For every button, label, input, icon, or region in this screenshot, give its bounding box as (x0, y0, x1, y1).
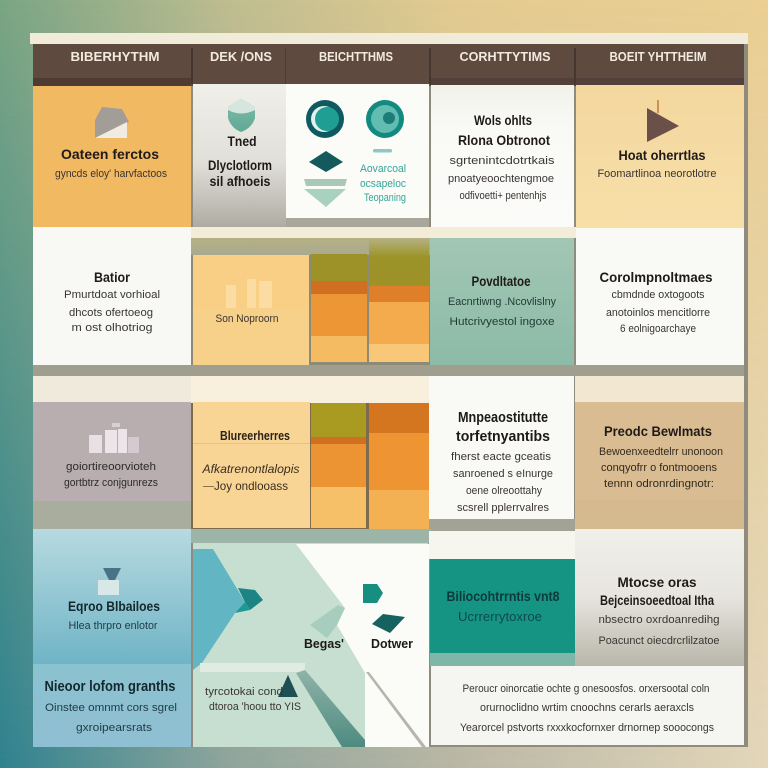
panel: peach with stacks (191, 376, 431, 531)
body line: sanroened s eInurge (453, 468, 553, 480)
panel: beige stacked chart (191, 227, 431, 365)
stacked column two (369, 238, 429, 362)
panel heading two: torfetnyantibs (456, 429, 550, 445)
shape: dark diagonal band (296, 670, 365, 747)
bar chart icon (226, 279, 272, 308)
body line: dtoroa 'hoou tto YIS (209, 701, 301, 713)
chart caption: Son Noproorn (216, 313, 278, 325)
panel: geometric folded centre (191, 529, 431, 747)
body line: Poacunct oiecdrcrlilzatoe (598, 635, 720, 647)
panel heading: Hoat oherrtlas (618, 148, 706, 163)
body line: dhcots ofertoeog (69, 307, 153, 319)
panel heading: Oateen ferctos (61, 147, 159, 162)
shape: teal pentagon (363, 584, 383, 603)
body line: Bewoenxeedtelrr unonoon (599, 446, 723, 458)
panel heading: Preodc Bewlmats (604, 424, 712, 439)
body line: m ost olhotriog (72, 322, 152, 334)
body line: 6 eolnigoarchaye (620, 323, 696, 335)
panel: blue upper left (33, 529, 191, 664)
panel caption: Hlea thrpro enlotor (68, 620, 158, 632)
panel caption: Foomartlinoa neorotlotre (598, 168, 716, 180)
panel caption: gyncds eloy' harvfactoos (55, 168, 167, 180)
stacked column three (311, 403, 366, 528)
body line: Peroucr oinorcatie ochte g onesoosfos. orxersootal coln (462, 683, 710, 695)
body line: gortbtrz conjgunrezs (64, 477, 158, 489)
shape: grey diagonal line (366, 672, 426, 747)
panel: cream and teal column four (429, 531, 575, 666)
body line: Joy ondlooass (214, 479, 288, 493)
shape: small dark triangle (278, 675, 298, 697)
body line: Yearorcel pstvorts rxxxkocfornxer drnornep sooocongs (460, 722, 714, 734)
header: column 1: BIBERHYTHM (70, 50, 160, 64)
body line: orurnoclidno wrtim cnoochns cerarls aeraxcls (480, 702, 694, 714)
panel heading: Tned (228, 134, 256, 149)
icon: stacked triangle (304, 179, 347, 207)
stacked column four (369, 403, 430, 531)
body line: tyrcotokai cond (205, 686, 283, 698)
panel: blue lower left (33, 664, 191, 747)
body line: scsrell pplerrvalres (457, 502, 549, 514)
panel heading: Biliocohtrrntis vnt8 (446, 589, 560, 604)
panel heading: Corolmpnoltmaes (600, 270, 712, 285)
panel heading: Blureerherres (220, 429, 290, 443)
body line: odfivoetti+ pentenhjs (460, 190, 547, 202)
body line: goiortireoorvioteh (66, 461, 156, 473)
shape: mint leaf (310, 605, 345, 638)
panel: white column four row three (429, 376, 575, 531)
shape: lower mint sheet (200, 663, 305, 672)
body line: fherst eacte gceatis (451, 451, 552, 463)
header: column 5: BOEIT YHTTHEIM (610, 50, 706, 64)
teal caption line two: ocsapeloc (360, 178, 406, 190)
icon: ring one (306, 100, 344, 138)
panel: peach top-right (576, 85, 744, 228)
panel caption: Ucrrerrytoxroe (458, 610, 542, 624)
panel heading one: Mnpeaostitutte (458, 410, 548, 426)
panel: white column four (431, 85, 574, 227)
icon: play triangle (647, 100, 679, 142)
body line: conqyofrr o fontmooens (601, 462, 717, 474)
header: column 2: DEK /ONS (210, 50, 272, 64)
header: column 4: CORHTTYTIMS (460, 50, 550, 64)
header: column 3: BEICHTTHMS (319, 50, 393, 64)
body line: oene olreoottahy (466, 485, 542, 497)
icon: ring two (366, 100, 404, 138)
body line: Eacnrtiwng .Ncovlislny (448, 296, 556, 308)
body line: cbmdnde oxtogoots (612, 289, 705, 301)
body line: Oinstee omnmt cors sgrel (45, 702, 177, 714)
body line: Afkatrenontlalopis (201, 462, 300, 476)
panel: grey gradient column two (193, 84, 287, 227)
shape: teal arrow (193, 549, 245, 670)
row gap (33, 365, 744, 376)
panel text line: sil afhoeis (210, 174, 270, 189)
icon: shield (228, 99, 255, 132)
panel text line: Dlyclotlorm (208, 158, 272, 173)
shape: dark kite (372, 614, 405, 633)
panel: white left row two (33, 227, 191, 365)
body line: nbsectro oxrdoanredihg (598, 614, 720, 626)
teal caption line three: Teopaning (364, 192, 406, 204)
body line: tennn odronrdingnotr: (604, 478, 714, 490)
icon: dark hexagon (309, 151, 343, 172)
panel: tan right (575, 376, 744, 529)
shape: teal diamond (235, 588, 263, 613)
panel heading one: Wols ohlts (474, 113, 532, 128)
shape: white folded sheet (296, 544, 429, 747)
panel heading: Eqroo Blbailoes (68, 599, 160, 614)
stacked column one (311, 254, 367, 362)
body line: gxroipearsrats (76, 722, 153, 734)
label: Begas' (304, 637, 344, 651)
panel: white right row two (576, 228, 744, 365)
panel: orange top-left (33, 86, 191, 227)
panel: mauve left (33, 376, 191, 529)
body line: sgrtenintcdotrtkais (450, 155, 555, 167)
body line: Pmurtdoat vorhioal (64, 289, 160, 301)
panel heading: Batior (94, 270, 131, 285)
icon: funnel box (98, 568, 121, 595)
label: Dotwer (371, 637, 413, 651)
body line: Hutcrivyestol ingoxe (450, 316, 554, 328)
panel heading two: Rlona Obtronot (458, 133, 550, 148)
teal caption line one: Aovarcoal (360, 163, 406, 175)
panel heading two: Bejceinsoeedtoal Itha (600, 593, 714, 608)
body line: anotoinlos mencitlorre (606, 307, 710, 319)
icon: dash (373, 149, 392, 152)
panel: bottom note (431, 666, 744, 745)
panel heading: Nieoor lofom granths (44, 679, 176, 695)
icon: house (95, 107, 129, 138)
panel heading one: Mtocse oras (618, 575, 696, 590)
body line: pnoatyeoochtengmoe (448, 173, 554, 185)
icon: bars (89, 423, 139, 453)
panel: grey-white right (575, 529, 744, 666)
panel heading: Povdltatoe (472, 274, 531, 289)
panel: column four cream strip and teal (430, 227, 576, 365)
panel: white icons (286, 84, 429, 227)
header row (33, 44, 744, 86)
